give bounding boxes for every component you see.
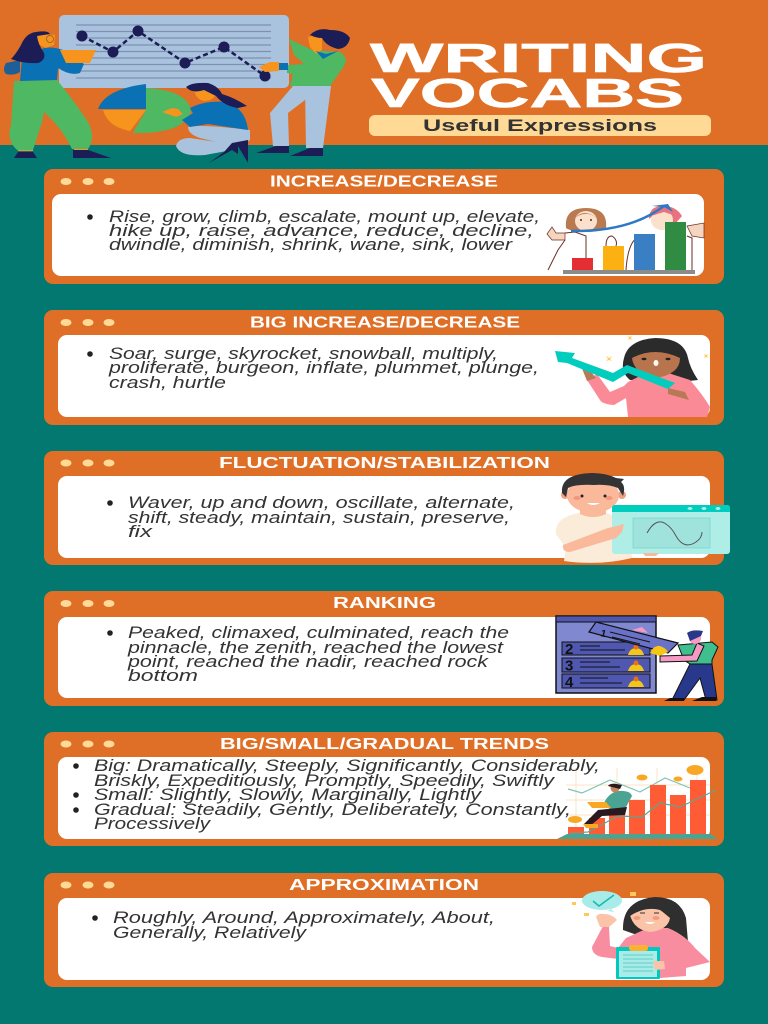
heading: APPROXIMATION xyxy=(289,877,479,894)
text block: pinnacle, the zenith, reached the lowest xyxy=(127,639,505,657)
text block xyxy=(73,757,600,833)
icon: two people with rising bars xyxy=(547,204,704,274)
pie chart xyxy=(98,84,191,133)
icon: man on rising bar chart xyxy=(557,765,718,839)
person: left woman xyxy=(4,31,111,158)
person: crouching woman xyxy=(162,83,250,163)
icon: ranked list with man xyxy=(556,616,718,701)
icon: man pointing at screen xyxy=(556,473,730,563)
text block: Waver, up and down, oscillate, alternate, xyxy=(128,494,515,512)
title: VOCABS xyxy=(371,70,684,116)
person: right man xyxy=(256,29,350,156)
panel: big/small/gradual trends xyxy=(44,732,724,846)
text block: point, reached the nadir, reached rock xyxy=(127,653,489,671)
text block: dwindle, diminish, shrink, wane, sink, lower xyxy=(109,236,514,254)
text block xyxy=(87,208,540,254)
header band xyxy=(0,0,768,145)
text block: shift, steady, maintain, sustain, preserve, xyxy=(128,509,510,527)
text block: Processively xyxy=(94,815,212,833)
text block: Roughly, Around, Approximately, About, xyxy=(113,909,495,927)
text block: Small: Slightly, Slowly, Marginally, Lightly xyxy=(94,786,483,804)
text block: Generally, Relatively xyxy=(113,924,308,942)
text block: proliferate, burgeon, inflate, plummet, plunge, xyxy=(108,359,539,377)
heading: BIG INCREASE/DECREASE xyxy=(250,314,520,332)
heading: RANKING xyxy=(333,595,436,612)
text block: crash, hurtle xyxy=(109,374,226,392)
panel: ranking xyxy=(44,591,724,706)
text block: Peaked, climaxed, culminated, reach the xyxy=(128,624,509,642)
icon: ranked list with man: 4 xyxy=(565,674,574,691)
panel: approximation xyxy=(44,873,724,987)
text block xyxy=(107,624,509,685)
illustration: team analysing charts xyxy=(4,15,350,163)
title xyxy=(370,35,707,116)
icon: ranked list with man: 1 xyxy=(599,628,608,640)
icon: woman with teal arrow xyxy=(555,336,710,417)
text block: Big: Dramatically, Steeply, Significantly, Considerably, xyxy=(94,757,600,775)
icon: woman with clipboard xyxy=(572,891,710,979)
heading: INCREASE/DECREASE xyxy=(270,174,498,190)
icon: ranked list with man: 2 xyxy=(565,641,573,658)
subtitle pill: Useful Expressions xyxy=(423,117,657,135)
panel: fluctuation/stabilization xyxy=(44,451,730,565)
text block: Gradual: Steadily, Gently, Deliberately, Constantly, xyxy=(94,801,571,819)
text block: bottom xyxy=(128,667,198,685)
panel: increase/decrease xyxy=(44,169,724,284)
text block: Rise, grow, climb, escalate, mount up, elevate, xyxy=(109,208,540,226)
text block xyxy=(107,494,515,541)
text block: Soar, surge, skyrocket, snowball, multiply, xyxy=(109,345,498,363)
text block xyxy=(92,909,495,942)
heading: BIG/SMALL/GRADUAL TRENDS xyxy=(220,736,549,753)
text block xyxy=(87,345,539,392)
text block: Briskly, Expeditiously, Promptly, Speedily, Swiftly xyxy=(94,772,556,790)
icon: ranked list with man: 3 xyxy=(565,658,573,674)
text block: fix xyxy=(128,523,153,541)
title: WRITING xyxy=(370,35,707,81)
heading: FLUCTUATION/STABILIZATION xyxy=(219,455,550,472)
text block: hike up, raise, advance, reduce, decline, xyxy=(109,222,534,240)
subtitle pill xyxy=(369,115,711,136)
panel: big increase/decrease xyxy=(44,310,724,425)
